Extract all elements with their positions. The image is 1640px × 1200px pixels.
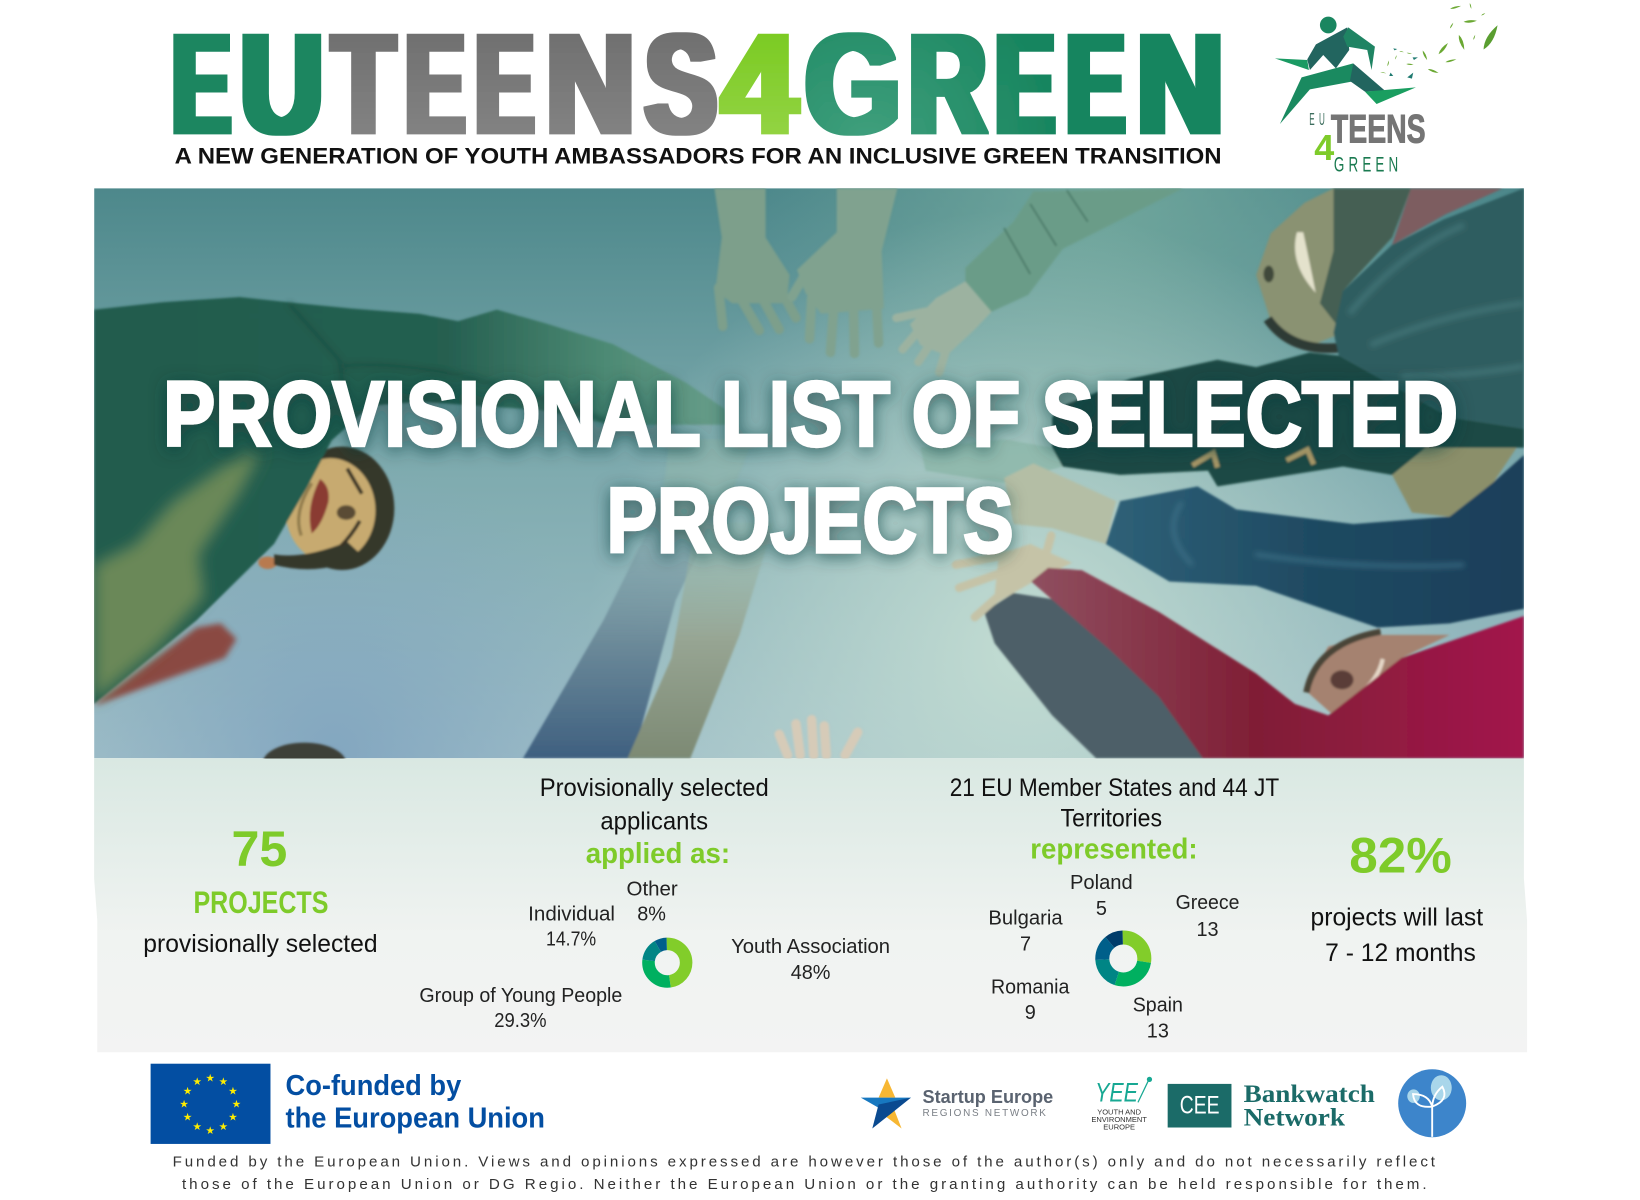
disclaimer: those of the European Union or DG Regio. Neither the European Union or the granting authority can be held responsible for them. bbox=[182, 1176, 1427, 1193]
heading: territories represented: Territories bbox=[1061, 805, 1162, 832]
title logotype: E bbox=[996, 4, 1054, 164]
heading: applicants applied as bbox=[540, 775, 769, 869]
icon: EU flag: ★ bbox=[192, 1122, 202, 1133]
logo: Youth and Environment Europe: YEE bbox=[1095, 1076, 1139, 1107]
icon: EU flag: ★ bbox=[206, 1073, 215, 1084]
donut chart: countries bbox=[1102, 937, 1144, 980]
upper right person bbox=[1256, 188, 1411, 348]
co-funded text: the European Union bbox=[286, 1102, 545, 1134]
title logotype: S bbox=[645, 4, 716, 164]
title logotype: 4 bbox=[722, 4, 797, 164]
chart labels: applicant types: 48% bbox=[791, 962, 830, 984]
icon: EU flag: ★ bbox=[228, 1113, 238, 1124]
icon: EUTeens4Green runner logo: TEENS bbox=[1331, 108, 1426, 152]
central arms bbox=[522, 532, 692, 758]
logo: Youth and Environment Europe: ENVIRONMENT bbox=[1091, 1115, 1147, 1124]
icon: EU flag: ★ bbox=[228, 1087, 238, 1098]
logo: Youth and Environment Europe bbox=[1091, 1076, 1152, 1131]
title logotype: N bbox=[546, 4, 635, 164]
chart labels: applicant types: Group of Young People bbox=[419, 985, 622, 1007]
heading: territories represented bbox=[950, 775, 1279, 865]
chart labels: applicant types: Youth Association bbox=[731, 936, 890, 958]
logo: Startup Europe bbox=[861, 1078, 1053, 1129]
main heading: PROJECTS bbox=[607, 469, 1013, 572]
lower hand bbox=[956, 536, 1072, 617]
chart labels: countries: 7 bbox=[1020, 934, 1031, 956]
title logotype: E bbox=[173, 4, 230, 164]
title logotype: N bbox=[1137, 4, 1224, 164]
title logotype: G bbox=[805, 4, 901, 164]
chart labels: countries: Spain bbox=[1133, 994, 1183, 1016]
disclaimer bbox=[173, 1154, 1436, 1193]
title logotype: T bbox=[333, 4, 394, 164]
heading: applicants applied as: Provisionally selected bbox=[540, 775, 769, 802]
heading: territories represented: represented: bbox=[1030, 833, 1198, 865]
main heading bbox=[163, 363, 1458, 572]
panel: statistics bbox=[94, 758, 1527, 1052]
co-funded text: Co-funded by bbox=[286, 1069, 462, 1101]
stat: 82% projects duration: 82% bbox=[1349, 827, 1452, 883]
chart labels: countries: Greece bbox=[1176, 892, 1239, 914]
logo: CEE Bankwatch Network: CEE bbox=[1180, 1091, 1220, 1119]
chart labels: countries: 5 bbox=[1096, 898, 1107, 920]
icon: EU flag: ★ bbox=[232, 1100, 241, 1111]
stat: 75 projects provisionally selected: provisionally selected bbox=[143, 931, 378, 958]
logo: Youth and Environment Europe: EUROPE bbox=[1103, 1122, 1135, 1131]
title logotype bbox=[173, 4, 1224, 164]
stat: 75 projects provisionally selected: PROJECTS bbox=[193, 885, 328, 920]
icon: blue plant circle bbox=[1398, 1069, 1466, 1137]
co-funded text bbox=[286, 1069, 545, 1134]
icon: EU flag: ★ bbox=[183, 1087, 192, 1098]
tagline: A NEW GENERATION OF YOUTH AMBASSADORS FOR AN INCLUSIVE GREEN TRANSITION bbox=[175, 143, 1222, 168]
logo: CEE Bankwatch Network bbox=[1168, 1081, 1375, 1131]
hero photo: young people reaching hands together seen from below bbox=[94, 188, 1524, 784]
stat: 75 projects provisionally selected bbox=[143, 821, 378, 958]
chart labels: applicant types: 29.3% bbox=[494, 1010, 546, 1032]
heading: applicants applied as: applicants bbox=[600, 808, 708, 835]
chart labels: applicant types: 14.7% bbox=[546, 929, 596, 951]
hair and face, left person bbox=[321, 445, 396, 572]
icon: EUTeens4Green runner logo bbox=[1275, 3, 1500, 176]
stat: 82% projects duration bbox=[1311, 827, 1483, 967]
chart labels: countries bbox=[988, 872, 1239, 1043]
disclaimer: Funded by the European Union. Views and opinions expressed are however those of the author(s) only and do not necessarily reflect bbox=[173, 1154, 1436, 1171]
top hands bbox=[714, 188, 796, 331]
chart labels: countries: Poland bbox=[1070, 872, 1133, 894]
icon: EUTeens4Green runner logo: 4 bbox=[1314, 127, 1334, 168]
denim sleeve bbox=[1106, 455, 1524, 628]
logo: Startup Europe: REGIONS NETWORK bbox=[923, 1108, 1046, 1119]
stat: 75 projects provisionally selected: 75 bbox=[231, 821, 287, 877]
dark sleeve bbox=[1052, 352, 1524, 486]
stat: 82% projects duration: projects will last bbox=[1311, 905, 1483, 932]
hand on denim bbox=[1004, 463, 1116, 544]
donut chart: applicant types bbox=[648, 944, 686, 981]
icon: EU flag: ★ bbox=[219, 1077, 228, 1088]
blond hair bbox=[1392, 448, 1517, 517]
title logotype: E bbox=[476, 4, 533, 164]
chart labels: countries: 13 bbox=[1147, 1021, 1169, 1043]
title logotype: U bbox=[241, 4, 323, 164]
icon: EU flag: ★ bbox=[206, 1126, 215, 1137]
chart labels: applicant types: 8% bbox=[637, 903, 666, 925]
logo: CEE Bankwatch Network: Network bbox=[1244, 1104, 1345, 1131]
title logotype: E bbox=[406, 4, 464, 164]
chart labels: countries: Romania bbox=[991, 977, 1070, 999]
icon: EU flag: ★ bbox=[179, 1100, 189, 1111]
icon: EU flag: ★ bbox=[183, 1113, 192, 1124]
chart labels: applicant types bbox=[419, 878, 890, 1032]
icon: EU flag: ★ bbox=[219, 1122, 228, 1133]
chart labels: countries: Bulgaria bbox=[988, 908, 1064, 930]
logo: Startup Europe: Startup Europe bbox=[923, 1086, 1053, 1107]
chart labels: countries: 9 bbox=[1025, 1002, 1036, 1024]
logo: CEE Bankwatch Network: Bankwatch bbox=[1244, 1081, 1375, 1108]
icon: EUTeens4Green runner logo: GREEN bbox=[1334, 152, 1402, 176]
icon: EU flag bbox=[151, 1064, 270, 1144]
title logotype: R bbox=[909, 4, 986, 164]
chart labels: applicant types: Other bbox=[627, 878, 678, 900]
chart labels: applicant types: Individual bbox=[528, 903, 615, 925]
chart labels: countries: 13 bbox=[1196, 919, 1219, 941]
title logotype: E bbox=[1067, 4, 1124, 164]
stat: 82% projects duration: 7 - 12 months bbox=[1325, 940, 1476, 967]
heading: applicants applied as: applied as: bbox=[586, 837, 730, 869]
icon: EUTeens4Green runner logo: EU bbox=[1309, 108, 1329, 129]
logo: Youth and Environment Europe: YOUTH AND bbox=[1097, 1107, 1142, 1116]
icon: EU flag: ★ bbox=[192, 1077, 202, 1088]
heading: territories represented: 21 EU Member States and 44 JT bbox=[950, 775, 1279, 802]
